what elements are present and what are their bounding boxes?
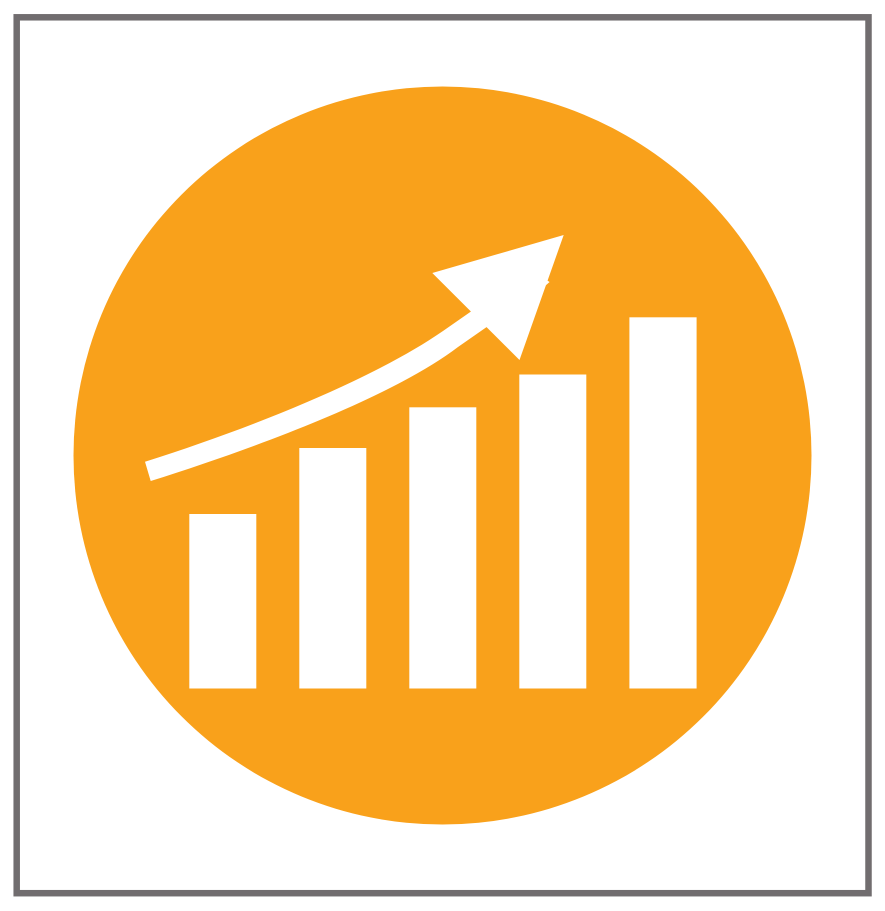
- icon: rising arrow: [145, 235, 564, 481]
- orange circle: [74, 86, 812, 824]
- bar chart: [189, 317, 697, 688]
